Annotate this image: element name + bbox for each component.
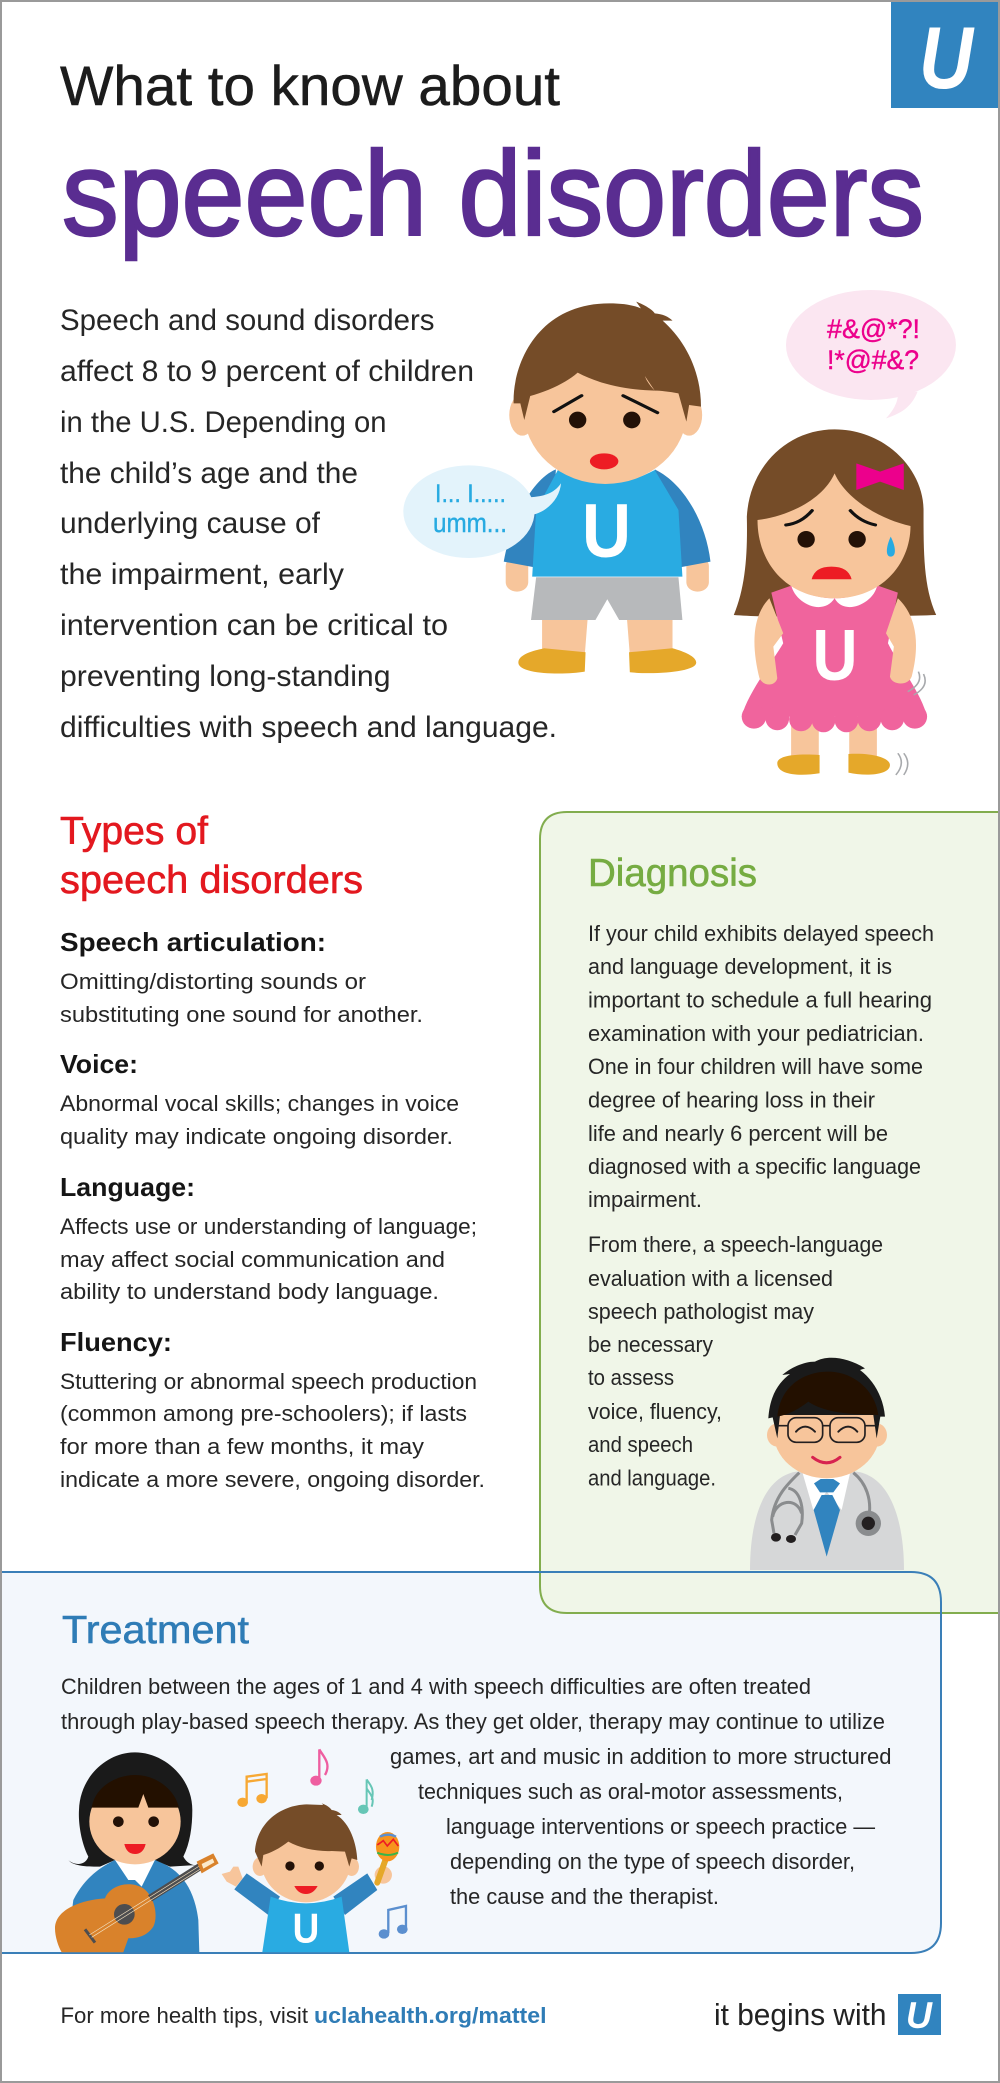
- text block: treatment body: games, art and music in addition to more structured: [390, 1744, 892, 1769]
- illustration: child with maraca: [222, 1803, 399, 1952]
- intro text: Speech and sound disorders: [60, 304, 434, 337]
- intro text: difficulties with speech and language.: [60, 711, 557, 744]
- text block: diagnosis body: life and nearly 6 percent will be: [588, 1121, 888, 1146]
- text block: speech articulation: Speech articulation:: [60, 927, 326, 957]
- intro text: the child’s age and the: [60, 457, 358, 490]
- text block: diagnosis body: [588, 921, 934, 1490]
- text block: treatment body: the cause and the therapist.: [450, 1884, 719, 1909]
- text block: treatment body: depending on the type of speech disorder,: [450, 1849, 855, 1874]
- heading: treatment: Treatment: [62, 1609, 249, 1652]
- heading: types of speech disorders: [60, 810, 363, 902]
- text block: treatment body: [61, 1674, 892, 1909]
- illustration: boy: [504, 302, 710, 674]
- footer logo: it begins with U: U: [906, 1995, 933, 2036]
- footer logo: it begins with U: [714, 1994, 941, 2036]
- illustration: girl: [734, 429, 936, 775]
- text block: treatment body: through play-based speech therapy. As they get older, therapy may continue to utilize: [61, 1709, 885, 1734]
- text block: diagnosis body: From there, a speech-language: [588, 1232, 883, 1257]
- speech bubble: boy: [403, 465, 561, 558]
- heading: types of speech disorders: speech disorders: [60, 859, 363, 902]
- text block: fluency: for more than a few months, it may: [60, 1434, 425, 1459]
- text block: language: [60, 1172, 477, 1304]
- intro text: preventing long-standing: [60, 660, 391, 693]
- intro text: in the U.S. Depending on: [60, 406, 386, 439]
- text block: fluency: Fluency:: [60, 1327, 172, 1357]
- text block: voice: quality may indicate ongoing disorder.: [60, 1124, 453, 1149]
- text block: voice: Abnormal vocal skills; changes in voice: [60, 1091, 459, 1116]
- intro text: the impairment, early: [60, 558, 344, 591]
- text block: voice: Voice:: [60, 1049, 138, 1079]
- text block: speech articulation: Omitting/distorting sounds or: [60, 969, 367, 994]
- footer logo: it begins with U: it begins with: [714, 1997, 886, 2032]
- illustration: girl: U: [812, 616, 858, 696]
- text block: diagnosis body: diagnosed with a specific language: [588, 1154, 921, 1179]
- text block: diagnosis body: and language.: [588, 1466, 716, 1490]
- footer: more health tips: uclahealth.org/mattel: [314, 2003, 546, 2028]
- heading: diagnosis: Diagnosis: [588, 852, 757, 895]
- text block: diagnosis body: voice, fluency,: [588, 1399, 722, 1424]
- text block: diagnosis body: and speech: [588, 1432, 693, 1457]
- logo: U badge: [891, 2, 998, 108]
- text block: fluency: (common among pre-schoolers); if lasts: [60, 1401, 467, 1426]
- illustration: doctor: [750, 1358, 904, 1570]
- text block: diagnosis body: important to schedule a full hearing: [588, 988, 932, 1012]
- speech bubble: girl: #&@*?!: [827, 314, 920, 344]
- intro text: [60, 304, 557, 744]
- text block: diagnosis body: to assess: [588, 1365, 674, 1390]
- text block: language: Affects use or understanding of language;: [60, 1214, 477, 1239]
- text block: diagnosis body: degree of hearing loss in their: [588, 1088, 875, 1112]
- text block: language: may affect social communication and: [60, 1247, 445, 1272]
- panel: treatment: [0, 1572, 941, 1953]
- text block: speech articulation: substituting one sound for another.: [60, 1002, 423, 1027]
- illustration: mother with guitar: [55, 1752, 219, 1952]
- footer: more health tips: [60, 2003, 546, 2028]
- text block: treatment body: language interventions or speech practice —: [446, 1814, 875, 1839]
- text block: diagnosis body: evaluation with a licensed: [588, 1266, 833, 1291]
- text block: diagnosis body: If your child exhibits delayed speech: [588, 921, 934, 946]
- text block: language: Language:: [60, 1172, 195, 1202]
- footer: more health tips: For more health tips, visit: [60, 2003, 309, 2028]
- speech bubble: girl: !*@#&?: [827, 345, 919, 375]
- intro text: intervention can be critical to: [60, 609, 448, 642]
- text block: fluency: Stuttering or abnormal speech production: [60, 1369, 477, 1394]
- text block: voice: [60, 1049, 459, 1149]
- logo: U badge: U: [919, 8, 975, 107]
- text block: speech articulation: [60, 927, 423, 1027]
- speech bubble: boy: umm...: [433, 508, 507, 538]
- text block: diagnosis body: and language development, it is: [588, 954, 892, 979]
- speech bubble: girl: [786, 290, 956, 418]
- text block: fluency: [60, 1327, 485, 1492]
- heading: types of speech disorders: Types of: [60, 810, 208, 853]
- title: speech disorders: speech disorders: [62, 127, 924, 261]
- text block: language: ability to understand body language.: [60, 1279, 439, 1304]
- text block: diagnosis body: One in four children will have some: [588, 1054, 923, 1079]
- panel: diagnosis: [540, 812, 1000, 1613]
- intro text: underlying cause of: [60, 507, 321, 540]
- intro text: affect 8 to 9 percent of children: [60, 355, 474, 388]
- text block: diagnosis body: be necessary: [588, 1332, 714, 1357]
- text block: treatment body: techniques such as oral-motor assessments,: [418, 1779, 843, 1804]
- illustration: child with maraca: U: [293, 1905, 319, 1952]
- text block: fluency: indicate a more severe, ongoing disorder.: [60, 1467, 485, 1492]
- text block: treatment body: Children between the ages of 1 and 4 with speech difficulties are often treated: [61, 1674, 811, 1699]
- title: what to know about: What to know about: [60, 54, 560, 117]
- text block: diagnosis body: impairment.: [588, 1187, 702, 1212]
- speech bubble: boy: I... I.....: [435, 480, 506, 508]
- text block: diagnosis body: examination with your pediatrician.: [588, 1021, 924, 1046]
- illustration: boy: U: [582, 489, 631, 574]
- panel background: treatment: [0, 1572, 941, 1953]
- text block: diagnosis body: speech pathologist may: [588, 1299, 815, 1324]
- icons: music notes: [237, 1749, 408, 1939]
